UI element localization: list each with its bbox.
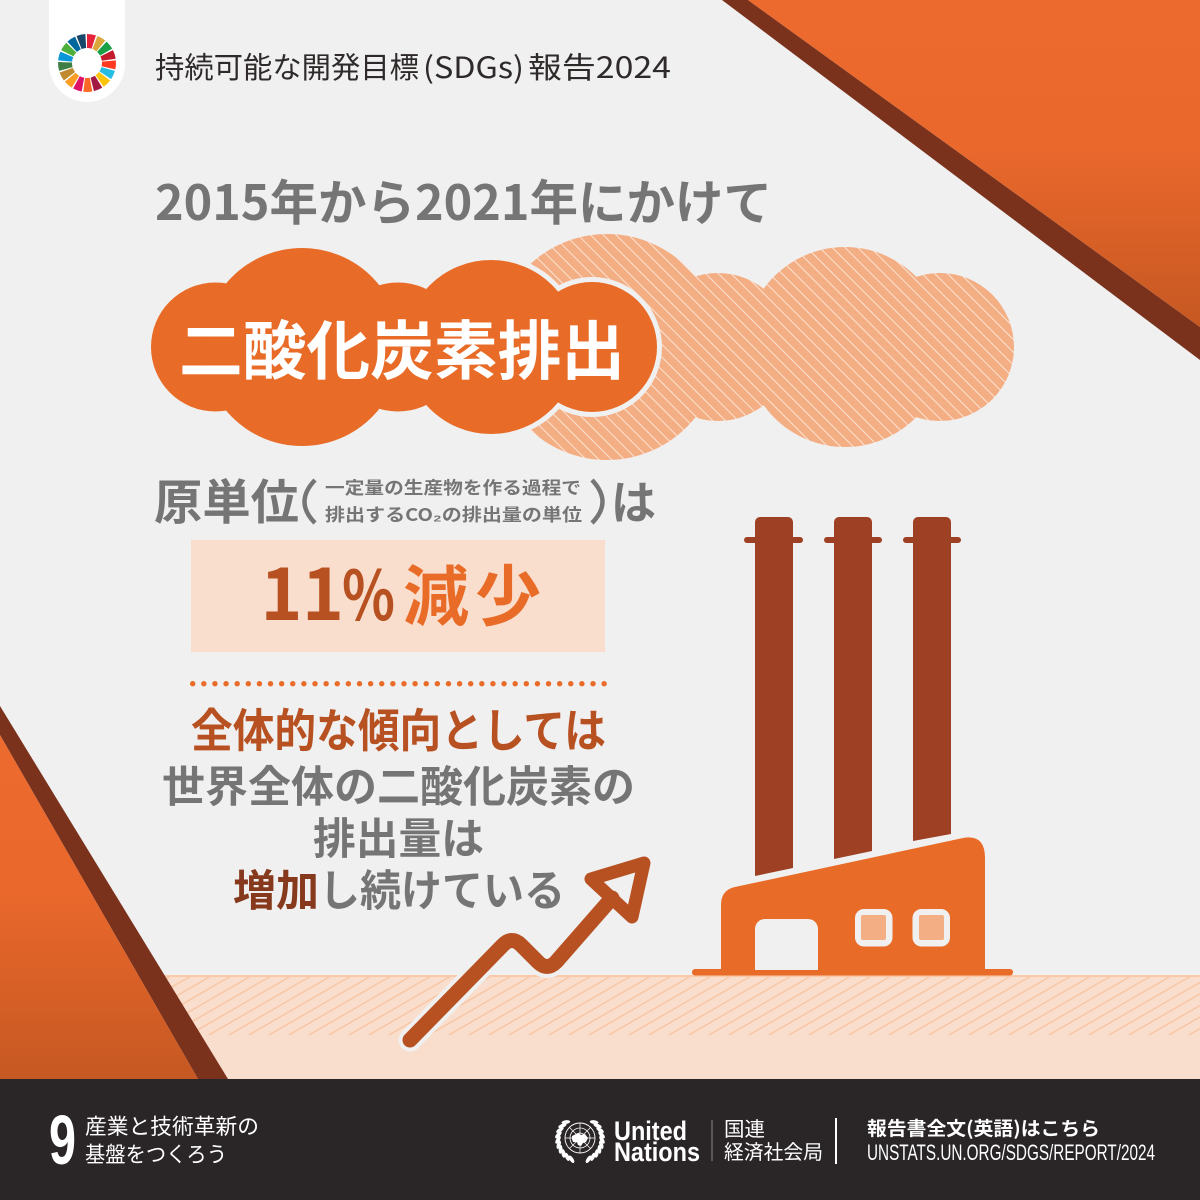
definition note: 排出するCO₂の排出量の単位	[325, 502, 583, 527]
icon: UN emblem	[554, 1120, 606, 1164]
goal number: 9	[49, 1101, 76, 1179]
report link	[867, 1114, 1155, 1165]
emission intensity line: は	[611, 467, 656, 533]
hatched back cloud	[494, 234, 1014, 460]
UN DESA name	[724, 1113, 823, 1165]
footer bar	[0, 1079, 1200, 1200]
definition note	[325, 475, 583, 527]
header title: 持続可能な開発目標	[155, 45, 419, 87]
goal name: 基盤をつくろう	[85, 1138, 227, 1169]
heading: period: 2015年から2021年にかけて	[155, 164, 772, 234]
trend text: 増加	[233, 857, 319, 919]
top-right corner decoration	[722, 0, 1200, 360]
window right	[912, 909, 950, 946]
trend text: 世界全体の二酸化炭素の	[162, 753, 635, 815]
front cloud with label	[151, 248, 657, 446]
stat box: 11% decrease	[191, 539, 605, 652]
window left	[855, 909, 892, 946]
factory base	[692, 969, 1013, 976]
door	[755, 919, 818, 970]
cloud label: 二酸化炭素排出	[179, 301, 625, 393]
trend text	[162, 695, 635, 919]
trend text: し続けている	[319, 857, 565, 919]
stat box: 11% decrease: 減少	[403, 544, 541, 640]
trend text: 排出量は	[313, 805, 484, 867]
factory building	[721, 837, 985, 970]
emission intensity line	[154, 463, 656, 533]
bottom-left corner decoration	[0, 706, 228, 1079]
goal name	[85, 1110, 259, 1169]
ground band	[0, 975, 1200, 1079]
header title: 報告2024	[528, 45, 671, 87]
goal name: 産業と技術革新の	[85, 1110, 259, 1141]
definition note: 一定量の生産物を作る過程で	[325, 475, 581, 500]
SDG logo tab	[49, 0, 125, 102]
trend text: 全体的な傾向としては	[191, 695, 606, 761]
report link: 報告書全文(英語)はこちら	[867, 1114, 1100, 1141]
dotted separator	[193, 681, 605, 686]
UN DESA name: 経済社会局	[724, 1136, 823, 1165]
header title	[155, 45, 671, 87]
United Nations wordmark: Nations	[614, 1137, 700, 1167]
stat box: 11% decrease: %	[342, 541, 395, 640]
stat box: 11% decrease: 11	[260, 539, 344, 641]
chimneys	[744, 517, 961, 876]
factory illustration	[692, 517, 1013, 976]
header title: (SDGs)	[423, 45, 524, 87]
rising arrow	[410, 863, 644, 1040]
UN DESA name: 国連	[724, 1113, 765, 1142]
emission intensity line: 原単位	[154, 463, 299, 533]
icon: SDG colour wheel	[56, 32, 118, 94]
United Nations wordmark	[614, 1116, 700, 1167]
United Nations wordmark: United	[614, 1116, 687, 1146]
